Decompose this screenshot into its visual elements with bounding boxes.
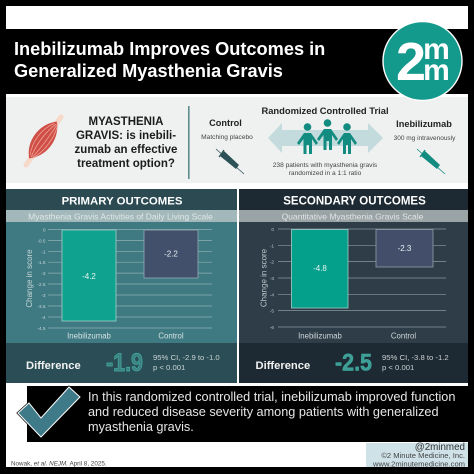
- bar: control: -2.2: [164, 250, 178, 258]
- secondary bar chart: -1: [270, 243, 274, 249]
- primary bar chart: -1.5: [37, 260, 46, 266]
- secondary scale label: [239, 210, 468, 222]
- secondary bar chart: Inebilizumab: [298, 332, 343, 340]
- control arm: [201, 118, 253, 174]
- panel: primary outcomes: [6, 189, 237, 383]
- primary bar chart: Inebilizumab: [67, 332, 112, 340]
- secondary bar chart: -4: [270, 292, 274, 298]
- bar: inebilizumab: [62, 230, 116, 321]
- primary heading: PRIMARY OUTCOMES: [62, 196, 183, 208]
- question text: GRAVIS: is inebili-: [76, 130, 176, 142]
- bar: control: [376, 230, 433, 267]
- icon: inebilizumab syringe: [417, 149, 445, 174]
- icon: check mark: [18, 387, 80, 437]
- trial design: Randomized Controlled Trial: [261, 105, 389, 116]
- icon: three patients: [297, 119, 357, 154]
- control arm: Matching placebo: [201, 134, 253, 141]
- trial design: randomized in a 1:1 ratio: [289, 170, 362, 177]
- conclusion banner: [27, 386, 468, 442]
- credit box: [366, 442, 468, 468]
- conclusion text: myasthenia gravis.: [88, 420, 194, 434]
- logo: 2 Minute Medicine: [383, 22, 462, 100]
- primary bar chart: -0.5: [37, 238, 46, 244]
- primary bar chart: -2: [41, 271, 46, 277]
- primary bar chart: Control: [158, 332, 184, 340]
- inebilizumab arm: [394, 119, 456, 174]
- secondary difference: -2.5: [335, 350, 372, 376]
- primary bar chart: [25, 228, 212, 340]
- secondary bar chart: -6: [270, 325, 274, 331]
- secondary bar chart: -2: [270, 260, 274, 266]
- icon: muscle: [21, 116, 65, 165]
- primary bar chart: 0: [43, 228, 46, 234]
- secondary bar chart: Control: [391, 332, 416, 340]
- icon: double arrow: [268, 123, 383, 153]
- secondary bar chart: 0: [271, 227, 274, 233]
- question text: treatment option?: [77, 158, 175, 170]
- panel: study question and design: [6, 97, 468, 183]
- primary bar chart: -4.5: [37, 326, 46, 332]
- control arm: Control: [209, 118, 242, 128]
- panel: secondary outcomes: [239, 189, 468, 383]
- logo: 2 Minute Medicine: m: [423, 33, 450, 66]
- inebilizumab arm: 300 mg intravenously: [394, 135, 456, 142]
- primary difference: -1.9: [106, 349, 143, 377]
- secondary difference: [239, 343, 468, 383]
- secondary difference: p < 0.001: [382, 363, 414, 372]
- primary scale label: Myasthenia Gravis Activities of Daily Living Scale: [28, 212, 213, 222]
- primary difference: p < 0.001: [153, 363, 185, 372]
- secondary difference: Difference: [256, 360, 310, 372]
- secondary scale label: Quantitative Myasthenia Gravis Scale: [282, 212, 424, 222]
- bar: control: [144, 230, 198, 278]
- citation: Nowak, et al. NEJM. April 8, 2025.: [11, 460, 107, 468]
- icon: control syringe: [216, 149, 244, 174]
- secondary bar chart: -3: [270, 276, 274, 282]
- secondary bar chart: -5: [270, 309, 274, 315]
- bar: inebilizumab: [292, 230, 348, 308]
- secondary heading: [239, 189, 468, 210]
- inebilizumab arm: Inebilizumab: [396, 119, 452, 129]
- credit box: ©2 Minute Medicine, Inc.: [381, 451, 465, 460]
- primary bar chart: -3: [41, 293, 46, 299]
- conclusion text: In this randomized controlled trial, inebilizumab improved function: [88, 390, 455, 404]
- primary bar chart: -2.5: [37, 282, 46, 288]
- primary difference: [6, 343, 237, 383]
- primary bar chart: -4: [41, 315, 46, 321]
- credit box: @2minmed: [415, 442, 465, 453]
- secondary heading: SECONDARY OUTCOMES: [283, 196, 426, 208]
- bar: inebilizumab: -4.8: [313, 264, 327, 273]
- secondary bar chart: [260, 227, 446, 340]
- title: Inebilizumab Improves Outcomes in: [14, 39, 325, 59]
- secondary difference: 95% CI, -3.8 to -1.2: [382, 353, 449, 362]
- question text: zumab an effective: [75, 144, 177, 156]
- credit box: www.2minutemedicine.com: [372, 460, 465, 468]
- question text: MYASTHENIA: [89, 116, 163, 128]
- title: Generalized Myasthenia Gravis: [14, 61, 283, 81]
- primary heading: [6, 189, 237, 210]
- primary difference: 95% CI, -2.9 to -1.0: [153, 353, 220, 362]
- bar: control: -2.3: [398, 244, 412, 253]
- trial design: 238 patients with myasthenia gravis: [273, 162, 378, 169]
- primary bar chart: -3.5: [37, 304, 46, 310]
- primary bar chart: Change in score: [25, 249, 34, 308]
- title band: [6, 29, 468, 94]
- bar: inebilizumab: -4.2: [82, 272, 96, 281]
- logo: 2 Minute Medicine: m: [423, 54, 450, 87]
- primary difference: Difference: [26, 360, 81, 372]
- primary scale label: [6, 210, 237, 222]
- logo: 2 Minute Medicine: 2: [396, 32, 426, 92]
- primary bar chart: -1: [41, 249, 46, 255]
- trial design: [261, 105, 389, 177]
- secondary bar chart: Change in score: [260, 248, 268, 307]
- conclusion text: and reduced disease severity among patients with generalized: [88, 405, 439, 419]
